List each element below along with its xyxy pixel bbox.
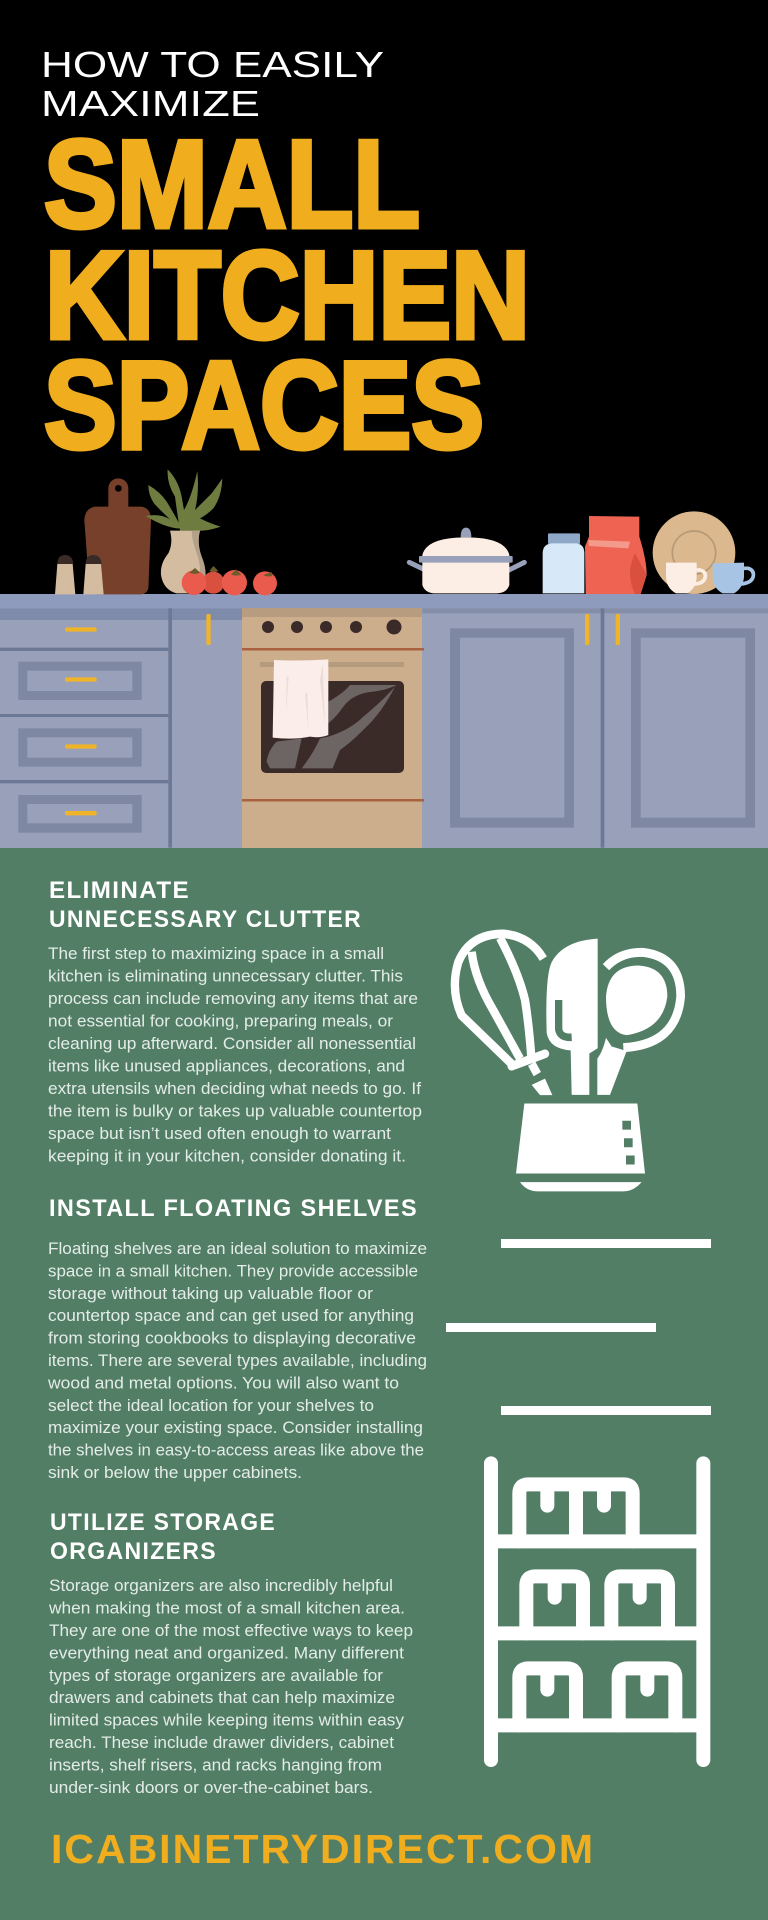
holder [516,1103,645,1191]
text: eliminate unnecessary clutter: process can include removing any items that are [48,990,418,1008]
heading: utilize storage organizers: UTILIZE STORAGE [50,1509,276,1536]
subtitle [41,44,384,124]
footer: website: ICABINETRYDIRECT.COM [51,1826,595,1872]
text: install floating shelves: sink or below the upper cabinets. [48,1464,302,1482]
main heading: SMALL [44,116,420,254]
text: eliminate unnecessary clutter: space but isn’t used often enough to warrant [48,1125,391,1143]
icon: storage rack with boxes [491,1463,703,1760]
left drawers [0,608,242,848]
icon: pepper shaker [86,555,102,564]
text: utilize storage organizers: limited spaces while keeping items within easy [49,1712,405,1730]
icon: vase shade [192,531,205,590]
icon: kitchen utensils in holder [455,934,681,1191]
main heading [44,116,530,475]
icon: salt shaker [57,555,73,564]
text: install floating shelves: countertop space and can get used for anything [48,1307,414,1325]
text: eliminate unnecessary clutter: the item is bulky or takes up valuable countertop [48,1102,422,1120]
text: install floating shelves: maximize your existing space. Consider installing [48,1419,423,1437]
text: install floating shelves: from storing cookbooks to displaying decorative [48,1330,416,1348]
text: install floating shelves: storage without taking up valuable floor or [48,1285,374,1303]
text: eliminate unnecessary clutter: not essential for cooking, preparing meals, or [48,1012,394,1030]
icon: salt shaker body [55,564,75,594]
main heading: SPACES [44,337,484,475]
icon: vase [161,531,205,593]
whisk [455,934,552,1095]
icon: plant [146,469,222,531]
text: utilize storage organizers: Storage organizers are also incredibly helpful [49,1577,393,1595]
icon: blue cup [713,563,753,593]
heading: utilize storage organizers [50,1509,276,1565]
title [41,44,530,475]
text: utilize storage organizers: under-sink doors or over-the-cabinet bars. [49,1779,373,1797]
text: utilize storage organizers: They are one of the most effective ways to keep [49,1622,413,1640]
heading: install floating shelves: INSTALL FLOATING SHELVES [49,1195,418,1222]
text: eliminate unnecessary clutter [48,945,422,1166]
text: utilize storage organizers: inserts, shelf risers, and racks hanging from [49,1756,382,1774]
text: install floating shelves: wood and metal options. You will also want to [47,1374,399,1392]
subtitle: MAXIMIZE [41,83,260,124]
icon: plate [653,511,735,594]
text: eliminate unnecessary clutter: keeping it in your kitchen, consider donating it. [48,1148,406,1166]
icon: floating shelves [446,1239,711,1415]
text: install floating shelves: items. There are several types available, including [48,1352,427,1370]
text: install floating shelves: space in a small kitchen. They provide accessible [48,1262,418,1280]
text: eliminate unnecessary clutter: kitchen is eliminating unnecessary clutter. This [48,968,403,986]
icon: pot [409,528,524,593]
icon: jar [543,533,584,593]
towel [273,659,328,739]
items: shakers, board, plant, tomatoes [55,469,277,595]
cabinets base [0,608,768,848]
spatula [546,939,598,1095]
countertop [0,594,768,608]
text: install floating shelves [47,1240,427,1482]
subtitle: HOW TO EASILY [41,44,384,85]
text: utilize storage organizers: drawers and cabinets that can help maximize [49,1689,395,1707]
heading: eliminate unnecessary clutter: ELIMINATE [49,877,190,904]
text: eliminate unnecessary clutter: The first step to maximizing space in a small [48,945,384,963]
text: utilize storage organizers: when making the most of a small kitchen area. [48,1599,405,1617]
text: install floating shelves: select the ideal location for your shelves to [48,1397,374,1415]
text: eliminate unnecessary clutter: extra utensils when deciding what needs to go. If [48,1080,421,1098]
icon: coffee bag [585,516,647,594]
text: install floating shelves: the shelves in easy-to-access areas like above the [48,1442,424,1460]
spoon [597,952,681,1095]
illustration: kitchen counter [0,469,768,848]
oven [242,608,424,848]
text: utilize storage organizers: everything neat and organized. Many different [49,1644,404,1662]
main heading: KITCHEN [45,227,530,365]
icon: tomatoes [182,566,277,595]
heading: eliminate unnecessary clutter: UNNECESSARY CLUTTER [49,906,362,933]
right cabinets [422,608,768,848]
heading: utilize storage organizers: ORGANIZERS [50,1538,217,1565]
icon: cream cup [666,563,705,593]
text: eliminate unnecessary clutter: cleaning up afterward. Consider all nonessential [48,1035,416,1053]
text: utilize storage organizers [48,1577,413,1797]
icon: cutting board [84,478,151,594]
text: utilize storage organizers: reach. These include drawer dividers, cabinet [49,1734,394,1752]
text: utilize storage organizers: types of storage organizers are available for [49,1667,384,1685]
text: install floating shelves: Floating shelves are an ideal solution to maximize [48,1240,427,1258]
icon: pepper shaker body [83,564,104,594]
heading: eliminate unnecessary clutter [49,877,362,933]
text: eliminate unnecessary clutter: items like unused appliances, decorations, and [48,1058,405,1076]
items: pot, jar, bag, crockery [409,511,753,594]
